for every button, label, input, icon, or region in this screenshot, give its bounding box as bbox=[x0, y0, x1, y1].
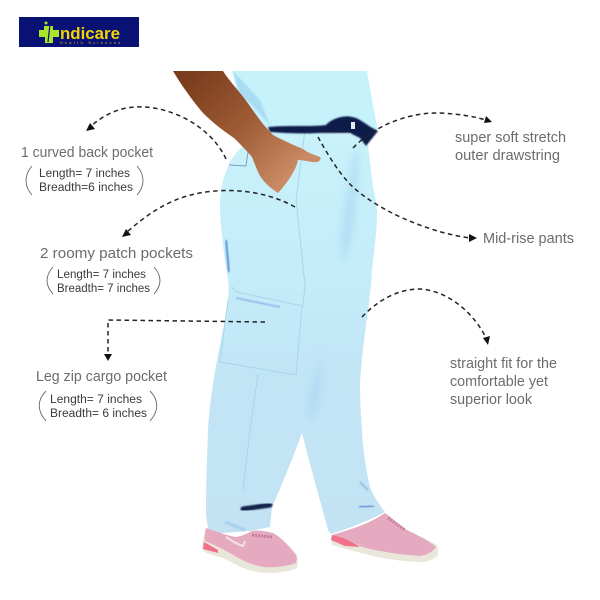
right shoe bbox=[331, 513, 438, 562]
text: mid-rise pants: Mid-rise pants bbox=[483, 231, 574, 247]
text block: curved back pocket: Length= 7 inches bbox=[39, 168, 130, 180]
text block: cargo pocket: Length= 7 inches bbox=[50, 394, 142, 406]
text block: curved back pocket: Breadth=6 inches bbox=[39, 182, 133, 194]
left shoe bbox=[202, 528, 298, 573]
text block: curved back pocket bbox=[21, 145, 153, 195]
arrow: to mid-rise bbox=[318, 137, 477, 242]
cargo pocket flap bbox=[232, 285, 305, 306]
waist tie bbox=[268, 116, 378, 146]
shirt bbox=[232, 71, 378, 132]
cargo pocket bbox=[220, 300, 302, 375]
logo: Indicare: Health Sciences bbox=[60, 41, 120, 45]
text block: cargo pocket: Breadth= 6 inches bbox=[50, 408, 147, 420]
pants bbox=[206, 130, 385, 534]
arrow: to drawstring bbox=[353, 113, 492, 148]
text block: straight fit: superior look bbox=[450, 392, 533, 408]
text block: patch pockets: 2 roomy patch pockets bbox=[40, 246, 193, 262]
text block: straight fit bbox=[450, 356, 557, 408]
logo: Indicare bbox=[19, 17, 139, 47]
arrow: to patch pockets bbox=[122, 191, 295, 237]
text block: drawstring bbox=[455, 130, 566, 164]
arrow: to cargo pocket bbox=[104, 320, 265, 361]
text block: patch pockets bbox=[40, 246, 193, 295]
text block: straight fit: comfortable yet bbox=[450, 374, 548, 390]
arrow: to curved back pocket bbox=[86, 107, 226, 159]
figure: model wearing light blue pants bbox=[173, 71, 438, 573]
arm and hand bbox=[173, 71, 321, 193]
logo: Indicare: ndicare bbox=[60, 24, 120, 43]
text block: patch pockets: Length= 7 inches bbox=[57, 269, 146, 281]
pants shading and folds bbox=[308, 150, 360, 425]
back pocket line bbox=[229, 152, 248, 166]
text block: drawstring: outer drawstring bbox=[455, 148, 560, 164]
text block: drawstring: super soft stretch bbox=[455, 130, 566, 146]
arrow: to straight fit bbox=[362, 289, 490, 345]
text block: straight fit: straight fit for the bbox=[450, 356, 557, 372]
text block: cargo pocket bbox=[36, 369, 167, 421]
text block: cargo pocket: Leg zip cargo pocket bbox=[36, 369, 167, 385]
text block: curved back pocket: 1 curved back pocket bbox=[21, 145, 153, 161]
text block: patch pockets: Breadth= 7 inches bbox=[57, 283, 150, 295]
